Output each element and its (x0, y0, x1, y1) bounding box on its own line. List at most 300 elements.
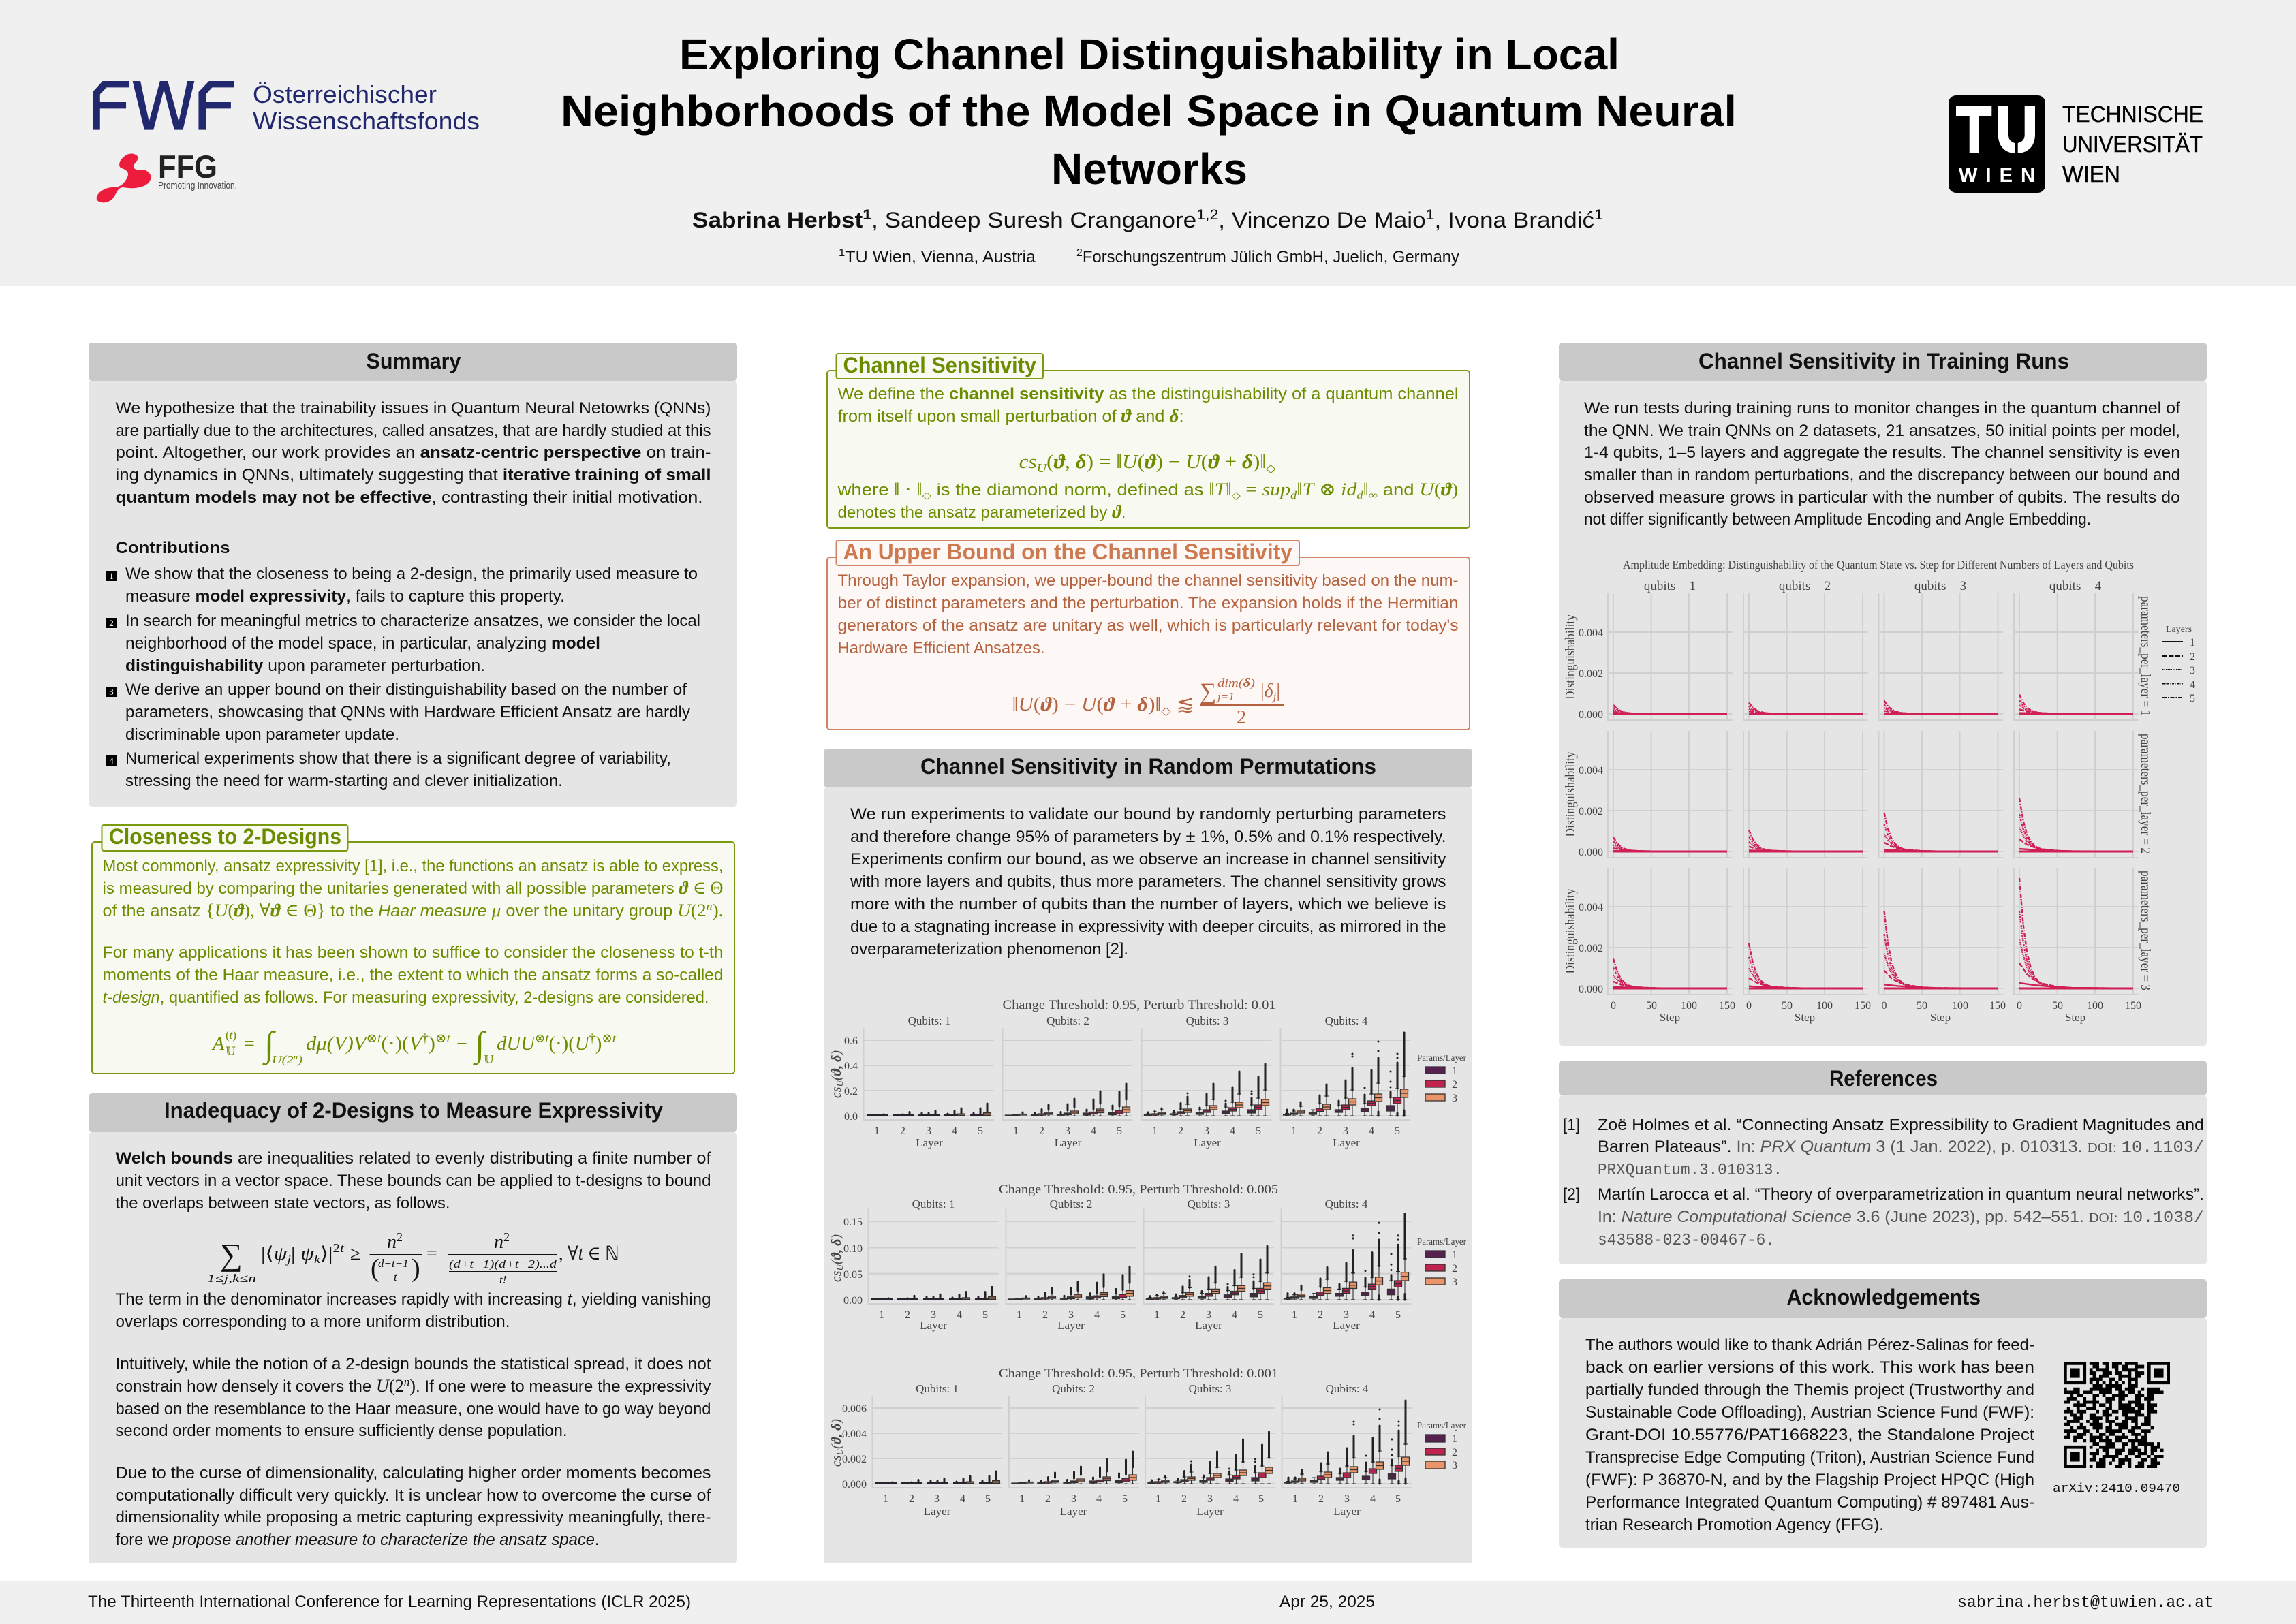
formula: upper bound: dim( δ) (1217, 676, 1255, 689)
panel: qubits 1: 12345 (874, 1125, 983, 1137)
list: contributions: We show that the closeness to being a 2-design, the primarily used measure to (125, 565, 698, 583)
formula: upper bound: ∑ (1200, 679, 1216, 704)
formula: Welch bound: = (426, 1243, 437, 1264)
heading: Contributions: Contributions (116, 539, 230, 557)
legend: layers: 1 (2190, 637, 2195, 649)
y axis title: cs (829, 1087, 844, 1098)
y axis labels: 0.004 (842, 1428, 867, 1440)
panel: qubits 3: Qubits: 3 (1188, 1198, 1230, 1211)
row 1: parameters per layer 1 (1563, 593, 2153, 721)
legend: 1 (1452, 1249, 1457, 1261)
text block: intuition (116, 1355, 711, 1440)
heading: References: References (1829, 1066, 1938, 1091)
list: contributions: parameters, showcasing that QNNs with Hardware Efficient Ansatz are hardly (125, 703, 690, 721)
text block: experiments: Experiments confirm our bound, as we observe an increase in channel sensitivity (850, 850, 1446, 869)
text block: curse of dimensionality (116, 1464, 711, 1549)
panel: qubits 4: Layer (1333, 1505, 1361, 1518)
x axis labels: 50 (1917, 1000, 1927, 1012)
text block: diamond norm: and (1378, 481, 1419, 499)
y axis labels: 0.15 (843, 1217, 863, 1228)
x axis labels: 50 (1646, 1000, 1657, 1012)
row 2: parameters per layer 2 (1563, 731, 2153, 858)
row 2: parameters per layer 2: Distinguishability (1563, 752, 1578, 837)
panel: qubits 2: Layer (1055, 1136, 1082, 1149)
text block: summary paragraph: quantum models may not be effective , contrasting their initial motivation. (116, 488, 703, 507)
row 2: parameters per layer 2: parameters_per_layer = 2 (2138, 734, 2153, 854)
text block: training tests: not differ significantly between Amplitude Encoding and Angle Embedding. (1584, 510, 2091, 529)
panel: qubits 3: 12345 (1152, 1125, 1261, 1137)
x axis labels: 150 (1855, 1000, 1871, 1012)
text block: experiments: We run experiments to validate our bound by randomly perturbing parameters (850, 805, 1446, 824)
text block: diamond norm: ◇ (922, 490, 932, 501)
text block: diamond norm: ‖T‖ (1209, 480, 1231, 499)
panel: qubits 2: 12345 (1013, 1125, 1122, 1137)
panel: Closeness to 2-Designs (92, 824, 734, 1074)
legend: 3 (1452, 1093, 1457, 1104)
panel: Acknowledgements (1559, 1279, 2207, 1548)
row 3: parameters per layer 3: 0.004 (1579, 902, 1603, 914)
panel: qubits 2: 12345 (1019, 1493, 1128, 1505)
footer: date: Apr 25, 2025 (1279, 1593, 1375, 1611)
x axis labels: 0 (2017, 1000, 2022, 1012)
y axis title: ϑ, δ) (829, 1050, 844, 1076)
legend: layers: 5 (2190, 693, 2195, 704)
heading: Summary: Summary (367, 349, 461, 373)
y axis labels: 0.00 (843, 1295, 863, 1307)
row 2: parameters per layer 2: 0.000 (1579, 847, 1603, 858)
x axis labels: 0 (1746, 1000, 1752, 1012)
legend: layers: 3 (2190, 665, 2195, 676)
affiliations: 1 (839, 247, 845, 259)
formula: upper bound: ‖U(ϑ) − U(ϑ + δ)‖ (1012, 694, 1160, 715)
text block: t-design: moments of the Haar measure, i.e., the extent to which the ansatz forms a so-called (102, 966, 724, 984)
panel: qubits 3: Qubits: 3 (1189, 1382, 1231, 1395)
QR code (2064, 1362, 2170, 1468)
panel: Summary (89, 343, 737, 807)
text block: training tests: the QNN. We train QNNs on 2 datasets, 21 ansatzes, 50 initial points per model, (1584, 422, 2180, 440)
formula: frame operator: ⊗ (535, 1031, 545, 1045)
formula: frame operator: † (589, 1031, 595, 1045)
formula: Welch bound: (d+t−1)(d+t−2)...d (449, 1258, 557, 1270)
affiliations: TU Wien, Vienna, Austria (845, 248, 1036, 266)
text block: training tests (1584, 399, 2180, 529)
formula: frame operator (211, 1025, 617, 1066)
y axis title: U (835, 1448, 845, 1455)
title: Networks (1051, 144, 1247, 193)
formula: channel sensitivity: cs (1019, 452, 1035, 473)
text block: definition: from itself upon small perturbation of ϑ and δ: (838, 406, 1184, 426)
x axis labels: 100 (1681, 1000, 1697, 1012)
list: contributions: neighborhood of the model space, in particular, analyzing model (125, 634, 600, 653)
logo: TU Wien: TECHNISCHE (2062, 102, 2203, 127)
panel: qubits 4: Qubits: 4 (1326, 1382, 1369, 1395)
panel: qubits 4: 12345 (1292, 1309, 1401, 1321)
panel: qubits 1: 12345 (879, 1309, 988, 1321)
formula: Welch bound: ≥ (350, 1243, 360, 1264)
logo: FFG (97, 149, 237, 202)
text block: diamond norm: U(ϑ) (1419, 480, 1457, 499)
formula: frame operator: ) (595, 1033, 602, 1055)
footer (0, 1581, 2296, 1624)
list: contributions: discriminable upon parameter update. (125, 725, 399, 744)
legend: 3 (1452, 1460, 1457, 1471)
text block: expressivity: n (707, 900, 713, 913)
formula: upper bound: j (1272, 690, 1277, 703)
formula: upper bound: ◇ (1161, 704, 1172, 717)
authors: 1,2 (1196, 207, 1218, 223)
legend: Params/Layer (1417, 1053, 1466, 1063)
x axis labels: 50 (1782, 1000, 1793, 1012)
panel: qubits 2: Layer (1060, 1505, 1087, 1518)
list: contributions: measure model expressivity, fails to capture this property. (125, 587, 565, 606)
panel: qubits 1 (864, 1014, 993, 1149)
panel: Inadequacy of 2-Designs (89, 1093, 737, 1563)
text block: acknowledgements: trian Research Promotion Agency (FFG). (1585, 1516, 1884, 1534)
legend: layers: 4 (2190, 679, 2195, 691)
text block: expressivity: Most commonly, ansatz expressivity [1], i.e., the functions an ansatz is able to express, (102, 857, 724, 875)
row 3: parameters per layer 3: 0.000 (1579, 984, 1603, 995)
row 1: parameters per layer 1: Distinguishability (1563, 614, 1578, 700)
formula: Welch bound: d+t−1 (378, 1257, 409, 1270)
row 2: parameters per layer 2: 0.004 (1579, 765, 1603, 777)
text block: curse of dimensionality: Due to the curse of dimensionality, calculating higher order moments becomes (116, 1464, 711, 1482)
y axis labels: 0.002 (842, 1454, 867, 1465)
formula: frame operator: n (294, 1053, 298, 1061)
chart: box plots, perturb threshold 0.005: Change Threshold: 0.95, Perturb Threshold: 0.005 (999, 1183, 1278, 1197)
text block: diamond norm: T ⊗ id (1303, 480, 1354, 499)
panel: Channel Sensitivity in Training Runs (1559, 343, 2207, 1046)
panel: References (1559, 1061, 2207, 1264)
text block: curse of dimensionality: fore we propose another measure to characterize the ansatz space. (116, 1531, 600, 1549)
panel: qubits 1: Qubits: 1 (908, 1014, 950, 1027)
formula: Welch bound: k (314, 1253, 320, 1266)
authors: 1 (1594, 207, 1603, 223)
formula: Welch bound: ∑ (220, 1237, 243, 1272)
formula: frame operator: † (422, 1031, 429, 1045)
reference 1: Barren Plateaus”. In: PRX Quantum 3 (1 Jan. 2022), p. 010313. DOI: 10.1103/ (1598, 1138, 2204, 1157)
text block: acknowledgements: Performance Integrated Quantum Computing) # 897481 Aus- (1585, 1493, 2034, 1512)
legend (1417, 1421, 1466, 1471)
panel: qubits 4: 12345 (1292, 1493, 1401, 1505)
text block: diamond norm: d (1290, 490, 1297, 501)
legend (1417, 1237, 1466, 1288)
legend: layers: 2 (2190, 651, 2195, 663)
x axis labels: 100 (2087, 1000, 2103, 1012)
footer: conference: The Thirteenth International Conference for Learning Representations (ICLR 2025) (88, 1593, 691, 1611)
formula: frame operator: ) (297, 1053, 302, 1066)
y axis labels (843, 1217, 863, 1307)
y axis labels: 0.0 (844, 1111, 858, 1123)
row 1: parameters per layer 1: 0.002 (1579, 668, 1603, 680)
panel: qubits 2: Qubits: 2 (1052, 1382, 1095, 1395)
list: contributions (106, 565, 700, 790)
chart: box plots, perturb threshold 0.01: Change Threshold: 0.95, Perturb Threshold: 0.01 (1003, 998, 1275, 1012)
legend: layers (2162, 625, 2195, 704)
QR caption: arXiv:2410.09470 (2053, 1482, 2180, 1496)
x axis labels: 150 (2125, 1000, 2141, 1012)
text block: training tests: We run tests during training runs to monitor changes in the quantum channel of (1584, 399, 2180, 418)
x axis labels: 50 (2052, 1000, 2063, 1012)
reference 1: PRXQuantum.3.010313. (1598, 1161, 1782, 1180)
formula: frame operator: ∫ (473, 1025, 486, 1065)
panel: qubits 3: Layer (1196, 1505, 1224, 1518)
text block: diamond norm (837, 480, 1458, 522)
formula: upper bound: ⪅ (1171, 694, 1194, 715)
formula: Welch bound: ⟩| (320, 1243, 333, 1264)
formula: Welch bound: n (494, 1232, 503, 1253)
formula: frame operator: ⊗ (366, 1031, 377, 1045)
formula: channel sensitivity: ◇ (1266, 462, 1277, 475)
text block: intuition: constrain how densely it covers the U(2 (116, 1376, 404, 1396)
logo: FWF (93, 80, 480, 135)
panel: qubits 2: Qubits: 2 (1046, 1014, 1089, 1027)
list: contributions: We derive an upper bound on their distinguishability based on the number of (125, 681, 687, 699)
list: contributions: 4 (109, 755, 114, 766)
text block: denominator (116, 1289, 711, 1331)
chart: distinguishability vs step (1563, 558, 2195, 1024)
text block: intuition: Intuitively, while the notion of a 2-design bounds the statistical spread, it does not (116, 1355, 711, 1373)
formula: Welch bound: t (394, 1270, 398, 1283)
text block: acknowledgements: Transprecise Edge Computing (Triton), Austrian Science Fund (1585, 1448, 2034, 1467)
legend: Params/Layer (1417, 1421, 1466, 1431)
y axis labels: 0.05 (843, 1269, 863, 1281)
x axis labels (1611, 1000, 2141, 1024)
text block: summary paragraph: are partially due to the architectures, called ansatzes, that are hardly studied at this (116, 422, 711, 440)
panel: qubits 1: 12345 (883, 1493, 991, 1505)
panel: qubits 4 (1281, 1198, 1412, 1332)
text block: intuition: ) (409, 1376, 416, 1396)
y axis title: ϑ, δ) (829, 1419, 844, 1444)
text block: acknowledgements: (FWF): P 36870-N, and by the Flagship Project HPQC (High (1585, 1471, 2034, 1489)
reference 1: [1] (1563, 1116, 1580, 1134)
text block: diamond norm: = (1241, 480, 1262, 499)
panel: qubits 2 (1006, 1198, 1136, 1332)
text block: experiments: more with the number of qubits than the number of layers, which we believe is (850, 895, 1446, 914)
y axis title: ( (829, 1259, 844, 1264)
text block: experiments (850, 805, 1446, 958)
text block: curse of dimensionality: dimensionality while proposing a metric capturing expressivity meaningfully, there- (116, 1508, 711, 1527)
text block: diamond norm: ◇ (1232, 490, 1241, 501)
heading: Inadequacy of 2-Designs to Measure Expressivity: Inadequacy of 2-Designs to Measure Expressivity (164, 1098, 663, 1123)
text block: experiments: with more layers and qubits, thus more parameters. The channel sensitivity grows (850, 873, 1446, 891)
authors: Sabrina Herbst (692, 208, 863, 232)
list: contributions: distinguishability upon parameter perturbation. (125, 657, 485, 675)
x axis labels: 100 (1816, 1000, 1833, 1012)
panel: qubits 1: Layer (924, 1505, 951, 1518)
formula: frame operator: = (244, 1033, 255, 1055)
formula: frame operator: t (447, 1031, 451, 1045)
formula: frame operator: t (612, 1031, 617, 1045)
y axis labels: 0.000 (842, 1479, 867, 1490)
affiliations: Forschungszentrum Jülich GmbH, Juelich, Germany (1083, 248, 1459, 266)
row 1: parameters per layer 1: 0.000 (1579, 709, 1603, 721)
panel: qubits 3 (1143, 1198, 1274, 1332)
reference 2: s43588-023-00467-6. (1598, 1232, 1775, 1250)
panel: qubits 2: Qubits: 2 (1050, 1198, 1092, 1211)
formula: frame operator: t (545, 1031, 550, 1045)
chart: box plots, perturb threshold 0.005 (829, 1183, 1466, 1332)
text block: diamond norm: d (1356, 490, 1364, 501)
header band (0, 0, 2296, 286)
y axis labels: 0.4 (844, 1061, 858, 1072)
y axis labels (842, 1403, 867, 1490)
panel: qubits 4 (1282, 1382, 1412, 1518)
panel: qubits 2: Layer (1057, 1319, 1085, 1332)
text block: intuition: . If one were to measure the expressivity (416, 1377, 709, 1396)
title: Neighborhoods of the Model Space in Quantum Neural (561, 87, 1737, 136)
y axis labels: 0.2 (844, 1086, 858, 1097)
column titles: qubits = 4 (2049, 579, 2102, 593)
text block: acknowledgements: Sustainable Code Offloading), Austrian Science Fund (FWF): (1585, 1403, 2034, 1422)
formula: frame operator: t (377, 1031, 382, 1045)
text block: expressivity (102, 857, 724, 920)
reference 2: Martín Larocca et al. “Theory of overparametrization in quantum neural networks”. (1598, 1185, 2204, 1204)
y axis labels: 0.10 (843, 1243, 863, 1255)
legend: 3 (1452, 1277, 1457, 1288)
panel: qubits 4 (1281, 1014, 1410, 1149)
panel: qubits 1 (868, 1198, 999, 1332)
chart: box plots, perturb threshold 0.01 (829, 998, 1466, 1149)
x axis labels: Step (1660, 1011, 1680, 1024)
panel: qubits 4: Layer (1333, 1319, 1360, 1332)
logo: TU Wien: WIEN (2062, 161, 2120, 187)
y axis labels: 0.6 (844, 1035, 858, 1047)
formula: Welch bound: 2 (397, 1230, 403, 1244)
logo: FWF: Wissenschaftsfonds (253, 107, 480, 135)
heading: Closeness to 2-Designs: Closeness to 2-Designs (109, 824, 341, 849)
column titles (1644, 579, 2102, 593)
panel: qubits 3: 12345 (1154, 1309, 1263, 1321)
reference 2 (1563, 1185, 2204, 1250)
authors: , Ivona Brandić (1435, 208, 1594, 232)
text block: t-design (102, 943, 724, 1007)
panel: qubits 4: Qubits: 4 (1325, 1198, 1368, 1211)
panel: qubits 3: Layer (1195, 1319, 1222, 1332)
text block: expressivity: is measured by comparing the unitaries generated with all possible parameters ϑ ∈ Θ (102, 878, 724, 898)
logo: TU Wien (1949, 95, 2203, 193)
formula: frame operator: V (409, 1033, 424, 1055)
formula: frame operator: ⊗ (435, 1031, 447, 1045)
panel: qubits 1: Qubits: 1 (912, 1198, 955, 1211)
list: contributions: 1 (109, 571, 114, 581)
formula: Welch bound: 2 (333, 1241, 340, 1255)
text block: diamond norm: ∞ (1369, 490, 1378, 501)
text block: intuition: based on the resemblance to the Haar measure, one would have to go way beyond (116, 1400, 711, 1418)
panel: qubits 2 (1009, 1382, 1139, 1518)
panel: qubits 2: 12345 (1017, 1309, 1126, 1321)
text block: acknowledgements: The authors would like to thank Adrián Pérez-Salinas for feed- (1585, 1336, 2034, 1354)
formula: frame operator: ⊗ (602, 1031, 612, 1045)
column titles: qubits = 3 (1914, 579, 1966, 593)
formula: channel sensitivity: U (1037, 461, 1047, 475)
text block: diamond norm: ‖ (1363, 480, 1369, 499)
formula: frame operator: ) (429, 1033, 435, 1055)
formula: Welch bound: , ∀t ∈ ℕ (559, 1243, 619, 1264)
formula: Welch bound: j (285, 1253, 291, 1266)
x axis labels: Step (1795, 1011, 1815, 1024)
list: contributions: 3 (109, 687, 114, 697)
formula: frame operator: (t) (226, 1029, 236, 1042)
text block: summary paragraph: point. Altogether, our work provides an ansatz-centric perspective on train- (116, 443, 711, 462)
formula: frame operator: U(2 (272, 1053, 290, 1066)
logo: FFG: FFG (158, 149, 217, 185)
panel: qubits 3 (1142, 1014, 1271, 1149)
formula: Welch bound: ) (412, 1254, 420, 1283)
panel: qubits 1: Layer (920, 1319, 947, 1332)
text block: Welch bounds (116, 1149, 711, 1213)
formula: upper bound: 2 (1237, 707, 1246, 728)
panel: Channel Sensitivity in Random Permutations (824, 749, 1472, 1563)
y axis title: cs (829, 1455, 844, 1467)
row 2: parameters per layer 2: 0.002 (1579, 806, 1603, 817)
chart: distinguishability vs step: Amplitude Embedding: Distinguishability of the Quantum State vs. Step for Different Numbers of Layers and Qubits (1623, 558, 2134, 572)
y axis title: U (835, 1263, 845, 1270)
panel: Channel Sensitivity (827, 353, 1470, 528)
formula: Welch bound: ψ (300, 1243, 315, 1264)
formula: Welch bound: t! (499, 1273, 506, 1286)
row 1: parameters per layer 1: 0.004 (1579, 627, 1603, 639)
y axis labels (844, 1035, 858, 1123)
text block: experiments: overparameterization phenomenon [2]. (850, 940, 1128, 958)
y axis title: ( (829, 1443, 844, 1449)
formula: channel sensitivity: ( (1046, 452, 1054, 473)
text block: acknowledgements: back on earlier versions of this work. This work has been (1585, 1358, 2034, 1377)
text block: experiments: and therefore change 95% of parameters by ± 1%, 0.5% and 0.1% respectively. (850, 826, 1446, 846)
reference 1 (1563, 1116, 2204, 1180)
formula: frame operator: dUU (497, 1033, 533, 1055)
panel: qubits 1: Qubits: 1 (916, 1382, 959, 1395)
x axis labels: 0 (1611, 1000, 1616, 1012)
text block: acknowledgements: Grant-DOI 10.55776/PAT1668223, the Standalone Project (1585, 1426, 2034, 1444)
legend: Params/Layer (1417, 1237, 1466, 1247)
x axis labels: Step (2065, 1011, 2085, 1024)
row 1: parameters per layer 1: parameters_per_layer = 1 (2138, 596, 2153, 716)
authors: , Vincenzo De Maio (1218, 208, 1426, 232)
column titles: qubits = 1 (1644, 579, 1696, 593)
text block: Welch bounds: Welch bounds are inequalities related to evenly distributing a finite number of (116, 1149, 711, 1168)
panel: qubits 3: Layer (1194, 1136, 1221, 1149)
logo: TU Wien: UNIVERSITÄT (2062, 131, 2203, 157)
text block: definition (838, 385, 1458, 426)
x axis labels: 100 (1952, 1000, 1968, 1012)
text block: Taylor expansion: Through Taylor expansion, we upper-bound the channel sensitivity based on the num- (838, 572, 1458, 590)
formula: Welch bound: 2 (503, 1230, 510, 1244)
list: contributions: stressing the need for warm-starting and clever initialization. (125, 772, 563, 790)
formula: frame operator: A (211, 1033, 225, 1055)
chart: box plots, perturb threshold 0.001: Change Threshold: 0.95, Perturb Threshold: 0.001 (999, 1367, 1278, 1381)
text block: diamond norm: is the diamond norm, defined as (931, 481, 1209, 499)
row 3: parameters per layer 3: 0.002 (1579, 943, 1603, 954)
list: contributions: 2 (109, 618, 114, 628)
formula: frame operator: dμ(V)V (306, 1033, 361, 1055)
formula: frame operator: U (575, 1033, 590, 1055)
panel: qubits 1: Layer (916, 1136, 943, 1149)
authors: 1 (863, 207, 871, 223)
text block: t-design: t-design, quantified as follows. For measuring expressivity, 2-designs are considered. (102, 988, 709, 1007)
text block: definition: We define the channel sensitivity as the distinguishability of a quantum channel (838, 385, 1458, 403)
formula: upper bound: | (1276, 681, 1280, 702)
text block: denominator: overlaps corresponding to a more uniform distribution. (116, 1313, 510, 1331)
column titles: qubits = 2 (1779, 579, 1831, 593)
formula: channel sensitivity: ϑ, δ) = ‖U(ϑ) − U(ϑ + δ)‖ (1054, 452, 1265, 473)
y axis title: cs (829, 1270, 844, 1282)
formula: upper bound (1012, 676, 1284, 728)
formula: Welch bound: |⟨ψ (261, 1243, 285, 1264)
text block: acknowledgements (1585, 1336, 2034, 1534)
text block: training tests: observed measure grows in particular with the number of qubits. The results do (1584, 488, 2180, 507)
row 3: parameters per layer 3: parameters_per_layer = 3 (2138, 871, 2153, 990)
text block: Taylor expansion: ber of distinct parameters and the perturbation. The expansion holds if the Hermitian (838, 594, 1458, 612)
